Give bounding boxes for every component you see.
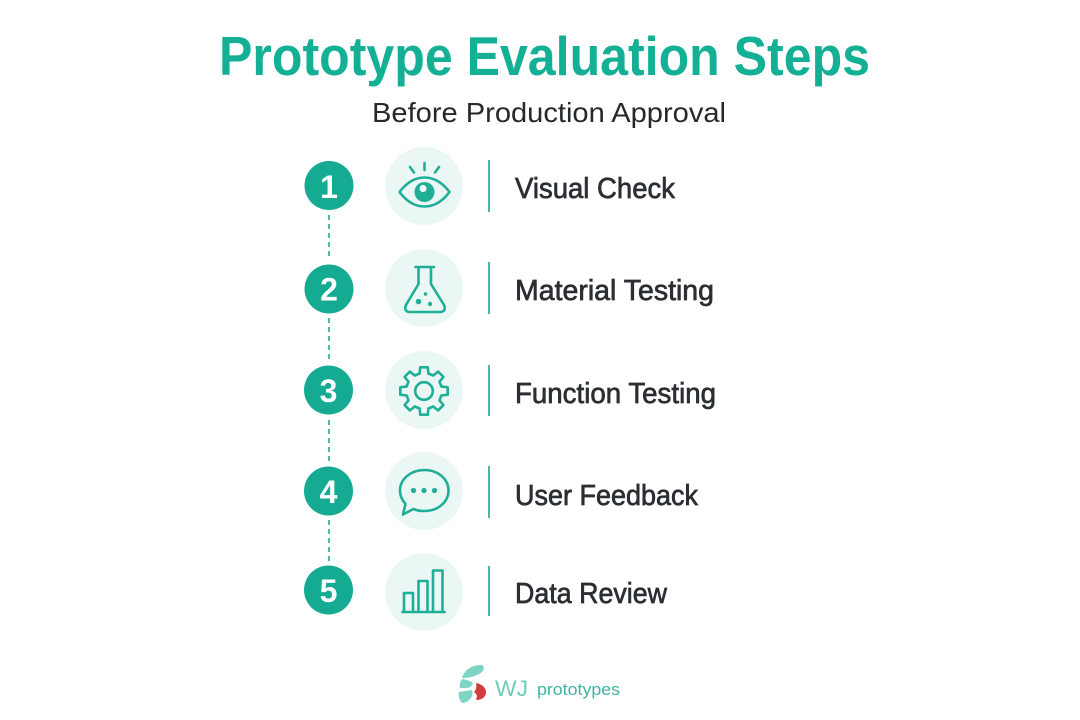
step 5: data review xyxy=(304,553,668,631)
number badge 3: 3 xyxy=(320,373,337,409)
label: user feedback: User Feedback xyxy=(515,480,698,512)
number badge 2: 2 xyxy=(320,272,338,308)
logo: WJ prototypes xyxy=(459,665,620,703)
divider xyxy=(488,566,490,616)
label: material testing: Material Testing xyxy=(515,275,714,307)
number badge 2 xyxy=(304,264,354,314)
label: function testing: Function Testing xyxy=(515,378,716,410)
label: visual check: Visual Check xyxy=(515,173,675,205)
icon: eye xyxy=(385,147,463,225)
number badge 4 xyxy=(304,466,353,516)
label: data review: Data Review xyxy=(515,578,668,610)
number badge 1: 1 xyxy=(320,169,338,205)
timeline connector xyxy=(328,215,330,562)
logo text WJ: WJ xyxy=(495,676,528,701)
divider xyxy=(488,466,490,518)
step 3: function testing xyxy=(304,351,716,429)
logo mark xyxy=(459,665,486,703)
icon: gear xyxy=(385,351,463,429)
number badge 3 xyxy=(304,366,353,414)
icon: bar chart xyxy=(385,553,463,631)
icon: speech bubble xyxy=(385,452,463,530)
number badge 5 xyxy=(304,566,353,614)
title: Prototype Evaluation Steps xyxy=(219,25,870,87)
subtitle: Before Production Approval xyxy=(372,97,726,128)
number badge 4: 4 xyxy=(320,474,338,510)
divider xyxy=(488,365,490,416)
logo text prototypes: prototypes xyxy=(537,680,620,699)
number badge 1 xyxy=(304,161,354,210)
step 4: user feedback xyxy=(304,452,698,530)
step 1: visual check xyxy=(304,147,675,225)
icon: flask xyxy=(385,249,463,327)
divider xyxy=(488,262,490,314)
step 2: material testing xyxy=(304,249,714,327)
divider xyxy=(488,160,490,212)
number badge 5: 5 xyxy=(320,573,337,609)
